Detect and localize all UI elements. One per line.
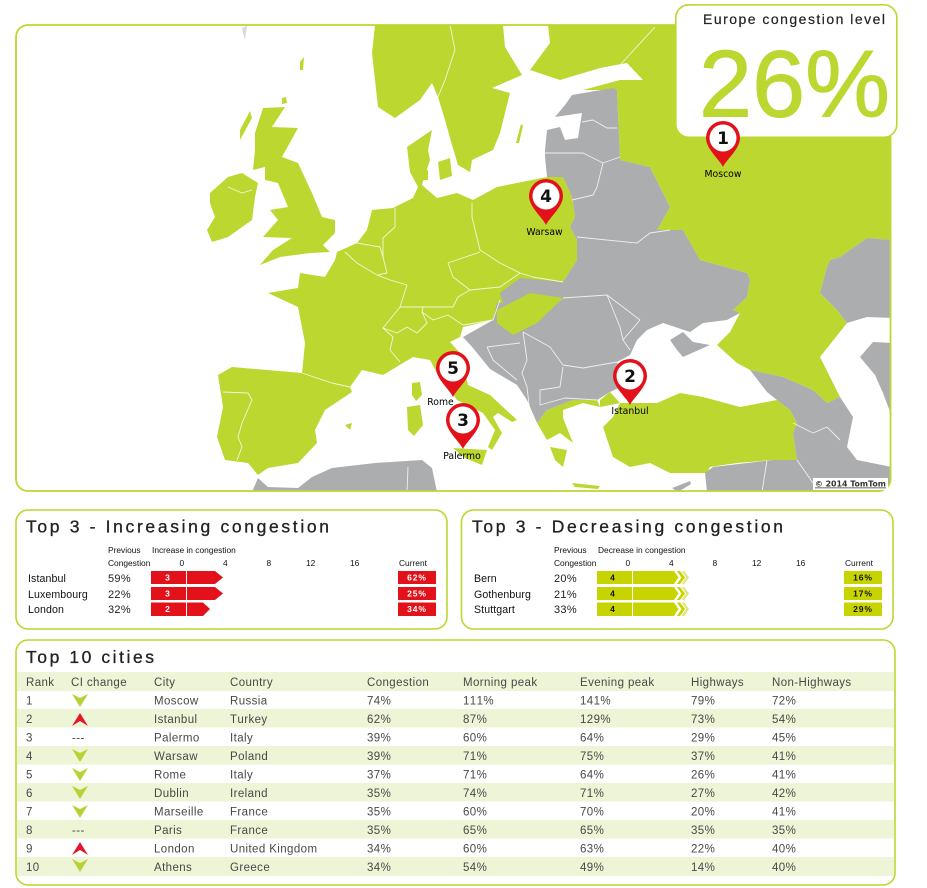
row 3: Palermo: 29% bbox=[691, 732, 715, 744]
row: Istanbul: 62% bbox=[407, 572, 427, 582]
row 6: Dublin: Dublin bbox=[154, 788, 189, 800]
row: Luxembourg bbox=[28, 587, 436, 601]
row: Stuttgart bbox=[474, 602, 882, 616]
row 4: Warsaw: 41% bbox=[772, 751, 796, 763]
row 3: Palermo: Palermo bbox=[154, 732, 200, 744]
row: Luxembourg: 25% bbox=[407, 588, 427, 598]
row 2: Istanbul: 129% bbox=[580, 714, 611, 726]
row: Bern: 20% bbox=[554, 573, 577, 585]
row 9: London bbox=[26, 842, 796, 856]
row 5: Rome: Italy bbox=[230, 770, 253, 782]
row 3: Palermo: 64% bbox=[580, 732, 604, 744]
chart header: decreasing: 8 bbox=[712, 558, 718, 568]
table header bbox=[26, 677, 852, 689]
row 4: Warsaw bbox=[26, 749, 796, 763]
chart header: increasing bbox=[108, 545, 428, 568]
row: Luxembourg: Luxembourg bbox=[28, 589, 88, 601]
row 7: Marseille: Marseille bbox=[154, 806, 204, 818]
row 8: Paris: 35% bbox=[367, 825, 391, 837]
chart header: increasing: Previous bbox=[108, 545, 141, 555]
chart header: decreasing: 16 bbox=[796, 558, 806, 568]
row 8: Paris: 65% bbox=[463, 825, 487, 837]
row: Istanbul: 59% bbox=[108, 573, 131, 585]
row: London: 2 bbox=[165, 604, 171, 614]
row 6: Dublin: 74% bbox=[463, 788, 487, 800]
chart header: decreasing: Current bbox=[845, 558, 874, 568]
row 2: Istanbul: 62% bbox=[367, 714, 391, 726]
row: London: 34% bbox=[407, 604, 427, 614]
row 3: Palermo: 39% bbox=[367, 732, 391, 744]
row 6: Dublin: 27% bbox=[691, 788, 715, 800]
row 5: Rome: 41% bbox=[772, 770, 796, 782]
chart header: decreasing: Congestion bbox=[554, 558, 597, 568]
chart header: increasing: 8 bbox=[266, 558, 272, 568]
row 3: Palermo: 60% bbox=[463, 732, 487, 744]
row 9: London: 40% bbox=[772, 844, 796, 856]
row: Gothenburg: 17% bbox=[853, 588, 873, 598]
chart header: decreasing bbox=[554, 545, 874, 568]
heading: Top 10 cities: Top 10 cities bbox=[26, 647, 154, 667]
marker: 1 Moscow: 1 bbox=[717, 129, 729, 149]
marker: 4 Warsaw bbox=[526, 179, 563, 238]
map: countries in lower congestion (grey) bbox=[242, 26, 892, 492]
row 7: Marseille: France bbox=[230, 806, 268, 818]
row 3: Palermo: 3 bbox=[26, 732, 33, 744]
row 6: Dublin bbox=[26, 786, 796, 800]
row: Bern bbox=[474, 571, 882, 585]
row: Gothenburg bbox=[474, 587, 882, 601]
row 8: Paris: --- bbox=[72, 825, 85, 837]
row 3: Palermo: 45% bbox=[772, 732, 796, 744]
chart header: increasing: Congestion bbox=[108, 558, 151, 568]
row: Istanbul bbox=[28, 571, 436, 585]
map frame bbox=[16, 25, 890, 491]
row 8: Paris: 35% bbox=[691, 825, 715, 837]
map: country borders bbox=[223, 25, 840, 492]
row 7: Marseille: 41% bbox=[772, 806, 796, 818]
row 10: Athens bbox=[26, 859, 796, 874]
row 4: Warsaw: 39% bbox=[367, 751, 391, 763]
table header: Evening peak bbox=[580, 677, 654, 689]
table header: Non-Highways bbox=[772, 677, 852, 689]
row 7: Marseille: 20% bbox=[691, 806, 715, 818]
row: Gothenburg: 21% bbox=[554, 589, 577, 601]
row 5: Rome: Rome bbox=[154, 770, 186, 782]
marker: 5 Rome bbox=[427, 351, 470, 408]
row 4: Warsaw: 37% bbox=[691, 751, 715, 763]
row: Luxembourg: 3 bbox=[165, 588, 171, 598]
row 5: Rome: 5 bbox=[26, 770, 33, 782]
row 6: Dublin: Ireland bbox=[230, 788, 268, 800]
callout heading: Europe congestion level bbox=[703, 11, 885, 27]
row 9: London: London bbox=[154, 844, 195, 856]
row 6: Dublin: 42% bbox=[772, 788, 796, 800]
row 10: Athens: Greece bbox=[230, 862, 270, 874]
chart header: increasing: Increase in congestion bbox=[152, 545, 236, 555]
map: Hungary highlight bbox=[497, 293, 563, 335]
row: Luxembourg: 22% bbox=[108, 589, 131, 601]
table header: Highways bbox=[691, 677, 744, 689]
row 1: Moscow: 79% bbox=[691, 696, 715, 708]
row 7: Marseille: 35% bbox=[367, 806, 391, 818]
row 9: London: 22% bbox=[691, 844, 715, 856]
callout value: 26% bbox=[699, 32, 890, 138]
row: Stuttgart: Stuttgart bbox=[474, 604, 515, 616]
row 2: Istanbul: 2 bbox=[26, 714, 33, 726]
row 2: Istanbul: 73% bbox=[691, 714, 715, 726]
map credit: © 2014 TomTom bbox=[815, 480, 886, 488]
row 9: London: 9 bbox=[26, 844, 33, 856]
chart header: increasing: 4 bbox=[223, 558, 228, 568]
marker: 3 Palermo: 3 bbox=[457, 411, 469, 431]
row 1: Moscow: Russia bbox=[230, 696, 268, 708]
row 5: Rome bbox=[26, 768, 796, 782]
row 10: Athens: 10 bbox=[26, 862, 40, 874]
row 9: London: 60% bbox=[463, 844, 487, 856]
row 10: Athens: 40% bbox=[772, 862, 796, 874]
row 4: Warsaw: Poland bbox=[230, 751, 268, 763]
row 1: Moscow: Moscow bbox=[154, 696, 199, 708]
table header: Country bbox=[230, 677, 273, 689]
panel: Top 3 decreasing congestion bbox=[462, 510, 893, 629]
row 8: Paris bbox=[26, 825, 796, 837]
marker: 2 Istanbul: 2 bbox=[624, 367, 636, 387]
row 3: Palermo: Italy bbox=[230, 732, 253, 744]
row 1: Moscow: 72% bbox=[772, 696, 796, 708]
row 7: Marseille: 7 bbox=[26, 806, 33, 818]
table header: CI change bbox=[71, 677, 127, 689]
row 5: Rome: 26% bbox=[691, 770, 715, 782]
map: countries in high congestion (green) bbox=[207, 25, 892, 489]
row 2: Istanbul bbox=[26, 713, 796, 726]
callout: Europe congestion level bbox=[676, 5, 897, 137]
row 5: Rome: 64% bbox=[580, 770, 604, 782]
chart header: decreasing: Previous bbox=[554, 545, 587, 555]
panel: Top 10 cities bbox=[16, 640, 895, 885]
row: Stuttgart: 33% bbox=[554, 604, 577, 616]
row 1: Moscow: 141% bbox=[580, 696, 611, 708]
row 8: Paris: 8 bbox=[26, 825, 33, 837]
marker: 3 Palermo: Palermo bbox=[443, 451, 481, 462]
row 8: Paris: France bbox=[230, 825, 268, 837]
row 4: Warsaw: 75% bbox=[580, 751, 604, 763]
marker: 2 Istanbul bbox=[611, 359, 649, 417]
row 4: Warsaw: 4 bbox=[26, 751, 33, 763]
chart header: increasing: 16 bbox=[350, 558, 360, 568]
marker: 4 Warsaw: Warsaw bbox=[526, 227, 563, 238]
chart header: increasing: 12 bbox=[306, 558, 316, 568]
row 8: Paris: 35% bbox=[772, 825, 796, 837]
marker: 2 Istanbul: Istanbul bbox=[611, 406, 649, 417]
row: Bern: 4 bbox=[610, 572, 616, 582]
row 9: London: 63% bbox=[580, 844, 604, 856]
row 4: Warsaw: Warsaw bbox=[154, 751, 198, 763]
row: Bern: 16% bbox=[853, 572, 873, 582]
row 1: Moscow bbox=[26, 694, 796, 708]
row 2: Istanbul: Istanbul bbox=[154, 714, 197, 726]
chart header: decreasing: 0 bbox=[626, 558, 630, 568]
row: Gothenburg: Gothenburg bbox=[474, 589, 531, 601]
row: Stuttgart: 4 bbox=[610, 604, 616, 614]
table: Top 10 cities bbox=[17, 672, 894, 876]
row: Istanbul: Istanbul bbox=[28, 573, 66, 585]
row 9: London: 34% bbox=[367, 844, 391, 856]
table header: Rank bbox=[26, 677, 54, 689]
row 10: Athens: 14% bbox=[691, 862, 715, 874]
row 1: Moscow: 111% bbox=[463, 696, 494, 708]
row 5: Rome: 71% bbox=[463, 770, 487, 782]
marker: 1 Moscow: Moscow bbox=[705, 169, 742, 180]
row 9: London: United Kingdom bbox=[230, 844, 317, 856]
table header: Morning peak bbox=[463, 677, 537, 689]
row 10: Athens: 49% bbox=[580, 862, 604, 874]
row 2: Istanbul: Turkey bbox=[230, 714, 268, 726]
marker: 4 Warsaw: 4 bbox=[540, 187, 552, 207]
row 1: Moscow: 1 bbox=[26, 696, 33, 708]
row 3: Palermo bbox=[26, 732, 796, 744]
panel: Europe map bbox=[16, 25, 892, 492]
marker: 5 Rome: 5 bbox=[447, 359, 459, 379]
row 8: Paris: 65% bbox=[580, 825, 604, 837]
row 10: Athens: Athens bbox=[154, 862, 192, 874]
chart header: decreasing: Decrease in congestion bbox=[598, 545, 686, 555]
row 2: Istanbul: 54% bbox=[772, 714, 796, 726]
marker: 3 Palermo bbox=[443, 403, 481, 462]
row: Stuttgart: 29% bbox=[853, 604, 873, 614]
row: London: London bbox=[28, 604, 64, 616]
row: London: 32% bbox=[108, 604, 131, 616]
row 7: Marseille: 70% bbox=[580, 806, 604, 818]
row: Bern: Bern bbox=[474, 573, 497, 585]
marker: 5 Rome: Rome bbox=[427, 397, 454, 408]
row 3: Palermo: --- bbox=[72, 732, 85, 744]
heading: decreasing: Top 3 - Decreasing congestion bbox=[472, 516, 783, 536]
row 7: Marseille: 60% bbox=[463, 806, 487, 818]
table header: City bbox=[154, 677, 175, 689]
chart header: decreasing: 4 bbox=[669, 558, 674, 568]
row 10: Athens: 54% bbox=[463, 862, 487, 874]
panel: Top 3 increasing congestion bbox=[16, 510, 447, 629]
row: Gothenburg: 4 bbox=[610, 588, 616, 598]
map credit bbox=[813, 478, 888, 490]
row 4: Warsaw: 71% bbox=[463, 751, 487, 763]
row 6: Dublin: 71% bbox=[580, 788, 604, 800]
marker: 1 Moscow bbox=[705, 121, 742, 180]
row: London bbox=[28, 602, 436, 616]
row 7: Marseille bbox=[26, 805, 796, 818]
chart header: increasing: 0 bbox=[180, 558, 184, 568]
chart header: increasing: Current bbox=[399, 558, 428, 568]
row: Istanbul: 3 bbox=[165, 572, 171, 582]
chart header: decreasing: 12 bbox=[752, 558, 762, 568]
row 8: Paris: Paris bbox=[154, 825, 182, 837]
heading: increasing: Top 3 - Increasing congestion bbox=[26, 516, 329, 536]
table header: Congestion bbox=[367, 677, 429, 689]
row 6: Dublin: 35% bbox=[367, 788, 391, 800]
row 5: Rome: 37% bbox=[367, 770, 391, 782]
row 2: Istanbul: 87% bbox=[463, 714, 487, 726]
row 10: Athens: 34% bbox=[367, 862, 391, 874]
row 6: Dublin: 6 bbox=[26, 788, 33, 800]
row 1: Moscow: 74% bbox=[367, 696, 391, 708]
